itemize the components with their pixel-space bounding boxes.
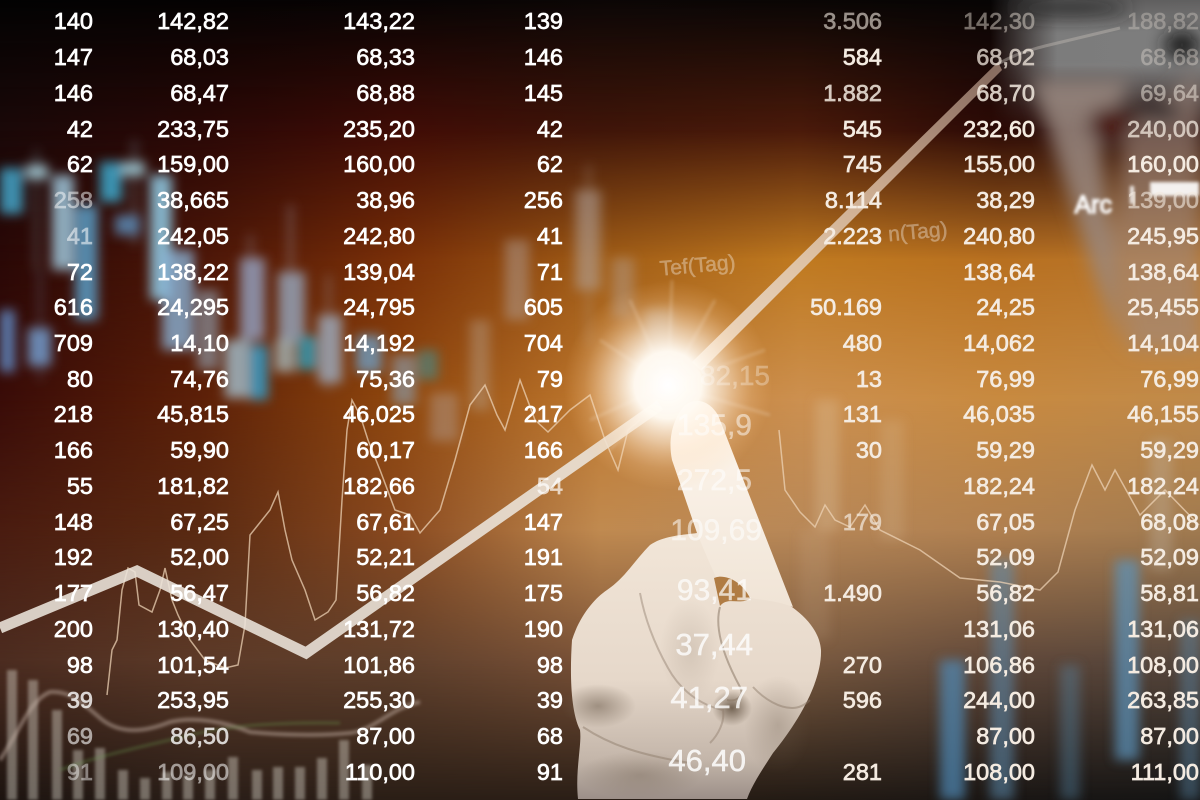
data column 5: 596 bbox=[843, 687, 882, 713]
data column 3 bbox=[343, 8, 415, 785]
ghost labels: 41,27 bbox=[670, 680, 748, 715]
data column 1: 140 bbox=[54, 8, 93, 34]
pointing hand bbox=[560, 401, 821, 799]
data column 6: 138,64 bbox=[963, 259, 1035, 285]
blurred candlesticks left bbox=[0, 140, 673, 441]
ghost labels: 93,41 bbox=[677, 574, 752, 607]
data column 1: 80 bbox=[67, 366, 93, 392]
hand shading bbox=[560, 598, 812, 799]
data column 7: 68,08 bbox=[1140, 509, 1199, 535]
data column 1: 42 bbox=[67, 116, 93, 142]
ghost labels: 37,44 bbox=[675, 627, 753, 662]
pointing finger bbox=[671, 401, 793, 607]
data column 3: 46,025 bbox=[343, 401, 415, 427]
data column 6: 106,86 bbox=[963, 652, 1035, 678]
data column 3: 143,22 bbox=[343, 8, 415, 34]
data column 2: 86,50 bbox=[170, 723, 229, 749]
data column 6: 14,062 bbox=[963, 330, 1035, 356]
data column 7: 182,24 bbox=[1127, 473, 1199, 499]
data column 3: 38,96 bbox=[356, 187, 415, 213]
data column 4: 62 bbox=[537, 151, 563, 177]
data column 7: 59,29 bbox=[1140, 437, 1199, 463]
data column 4: 191 bbox=[524, 544, 563, 570]
data column 7: 108,00 bbox=[1127, 652, 1199, 678]
data column 7: 52,09 bbox=[1140, 544, 1199, 570]
data column 7 bbox=[1127, 8, 1199, 785]
data column 5: 745 bbox=[843, 151, 882, 177]
ghost labels: 109,69 bbox=[670, 514, 762, 547]
data column 5: 8.114 bbox=[825, 187, 882, 213]
data column 7: 245,95 bbox=[1127, 223, 1199, 249]
data column 7: 111,00 bbox=[1131, 759, 1199, 785]
data column 7: 76,99 bbox=[1140, 366, 1199, 392]
data column 5: 131 bbox=[843, 401, 882, 427]
data column 5: 584 bbox=[843, 44, 882, 70]
data column 6: 46,035 bbox=[963, 401, 1035, 427]
data column 6: 76,99 bbox=[976, 366, 1035, 392]
data column 7: 263,85 bbox=[1127, 687, 1199, 713]
data column 4: 68 bbox=[537, 723, 563, 749]
data column 4: 71 bbox=[537, 259, 563, 285]
data column 3: 68,33 bbox=[356, 44, 415, 70]
data column 4: 42 bbox=[537, 116, 563, 142]
data column 4: 175 bbox=[524, 580, 563, 606]
data column 4: 39 bbox=[537, 687, 563, 713]
data column 2: 59,90 bbox=[170, 437, 229, 463]
data column 2: 253,95 bbox=[157, 687, 229, 713]
data column 3: 101,86 bbox=[343, 652, 415, 678]
fist bbox=[571, 533, 821, 799]
data column 4: 79 bbox=[537, 366, 563, 392]
data column 6: 56,82 bbox=[976, 580, 1035, 606]
data column 4: 145 bbox=[524, 80, 563, 106]
data column 6: 87,00 bbox=[976, 723, 1035, 749]
data column 4: 190 bbox=[524, 616, 563, 642]
data column 6: 131,06 bbox=[963, 616, 1035, 642]
data column 1: 62 bbox=[67, 151, 93, 177]
data column 6 bbox=[963, 8, 1035, 785]
data column 1: 147 bbox=[54, 44, 93, 70]
data column 1: 258 bbox=[54, 187, 93, 213]
data column 7: 188,82 bbox=[1127, 8, 1199, 34]
ghost labels: n(Tag) bbox=[887, 218, 948, 246]
data column 3: 68,88 bbox=[356, 80, 415, 106]
data column 5: 13 bbox=[856, 366, 882, 392]
data column 1: 709 bbox=[54, 330, 93, 356]
data column 6: 67,05 bbox=[976, 509, 1035, 535]
data column 3: 182,66 bbox=[343, 473, 415, 499]
data column 7: 14,104 bbox=[1127, 330, 1199, 356]
data column 7: 25,455 bbox=[1127, 294, 1199, 320]
data column 7: 138,64 bbox=[1127, 259, 1199, 285]
data column 5: 545 bbox=[843, 116, 882, 142]
data column 3: 67,61 bbox=[356, 509, 415, 535]
data column 1 bbox=[54, 8, 93, 785]
soft moving average line bbox=[0, 692, 420, 770]
data column 3: 131,72 bbox=[343, 616, 415, 642]
touch glow bbox=[563, 280, 773, 490]
data column 3: 75,36 bbox=[356, 366, 415, 392]
data column 6: 182,24 bbox=[963, 473, 1035, 499]
data column 5: 50.169 bbox=[810, 294, 882, 320]
data column 2: 142,82 bbox=[157, 8, 229, 34]
data column 1: 166 bbox=[54, 437, 93, 463]
data column 2: 101,54 bbox=[157, 652, 229, 678]
data column 6: 244,00 bbox=[963, 687, 1035, 713]
data column 4: 217 bbox=[524, 401, 563, 427]
data column 3: 139,04 bbox=[343, 259, 415, 285]
data column 1: 200 bbox=[54, 616, 93, 642]
data column 2: 68,47 bbox=[170, 80, 229, 106]
data column 6: 52,09 bbox=[976, 544, 1035, 570]
data column 6: 68,70 bbox=[976, 80, 1035, 106]
data column 2: 38,665 bbox=[157, 187, 229, 213]
white rising arrow line bbox=[0, 28, 1120, 653]
data column 4: 704 bbox=[524, 330, 563, 356]
data column 2: 67,25 bbox=[170, 509, 229, 535]
data column 6: 155,00 bbox=[963, 151, 1035, 177]
data column 1: 148 bbox=[54, 509, 93, 535]
data column 3: 160,00 bbox=[343, 151, 415, 177]
data column 4: 146 bbox=[524, 44, 563, 70]
data column 7: 87,00 bbox=[1140, 723, 1199, 749]
data column 7: 240,00 bbox=[1127, 116, 1199, 142]
finger shadow gap bbox=[714, 576, 751, 606]
data column 4: 41 bbox=[537, 223, 563, 249]
ghost labels: Tef(Tag) bbox=[659, 251, 736, 281]
data column 4: 147 bbox=[524, 509, 563, 535]
data column 4 bbox=[524, 8, 563, 785]
data column 2: 109,00 bbox=[157, 759, 229, 785]
data column 1: 39 bbox=[67, 687, 93, 713]
data column 2: 74,76 bbox=[170, 366, 229, 392]
ghost labels: 82,15 bbox=[700, 360, 770, 391]
data column 3: 52,21 bbox=[356, 544, 415, 570]
data column 5 bbox=[810, 8, 882, 785]
data column 7: 68,68 bbox=[1140, 44, 1199, 70]
ghost labels: 135,9 bbox=[677, 409, 752, 442]
data column 2 bbox=[157, 8, 229, 785]
data column 5: 2.223 bbox=[823, 223, 882, 249]
ghost labels bbox=[659, 218, 948, 778]
data column 3: 14,192 bbox=[343, 330, 415, 356]
data column 5: 270 bbox=[843, 652, 882, 678]
data column 3: 110,00 bbox=[345, 759, 415, 785]
volume bars bottom left bbox=[7, 670, 372, 800]
data column 6: 240,80 bbox=[963, 223, 1035, 249]
data column 4: 98 bbox=[537, 652, 563, 678]
data column 6: 59,29 bbox=[976, 437, 1035, 463]
data column 5: 179 bbox=[843, 509, 882, 535]
data column 3: 255,30 bbox=[343, 687, 415, 713]
data column 5: 30 bbox=[856, 437, 882, 463]
data column 6: 38,29 bbox=[976, 187, 1035, 213]
data column 1: 72 bbox=[67, 259, 93, 285]
data column 7: 131,06 bbox=[1127, 616, 1199, 642]
data column 2: 24,295 bbox=[157, 294, 229, 320]
data column 4: 91 bbox=[537, 759, 563, 785]
data column 3: 235,20 bbox=[343, 116, 415, 142]
data column 2: 233,75 bbox=[157, 116, 229, 142]
data column 2: 130,40 bbox=[157, 616, 229, 642]
data column 7: 46,155 bbox=[1127, 401, 1199, 427]
data column 2: 68,03 bbox=[170, 44, 229, 70]
blurred candlesticks right bbox=[800, 400, 1200, 800]
data column 4: 166 bbox=[524, 437, 563, 463]
data column 2: 45,815 bbox=[157, 401, 229, 427]
data column 6: 232,60 bbox=[963, 116, 1035, 142]
data column 4: 605 bbox=[524, 294, 563, 320]
thin price line chart bbox=[107, 380, 1199, 695]
data column 3: 87,00 bbox=[356, 723, 415, 749]
data column 3: 56,82 bbox=[356, 580, 415, 606]
data column 1: 41 bbox=[67, 223, 93, 249]
data column 1: 218 bbox=[54, 401, 93, 427]
data column 1: 98 bbox=[67, 652, 93, 678]
data column 2: 14,10 bbox=[170, 330, 229, 356]
data column 5: 281 bbox=[843, 759, 882, 785]
overlay labels: Arc bbox=[1074, 191, 1112, 219]
data column 6: 108,00 bbox=[963, 759, 1035, 785]
data column 7: 58,81 bbox=[1140, 580, 1199, 606]
data column 1: 91 bbox=[67, 759, 93, 785]
data column 3: 24,795 bbox=[343, 294, 415, 320]
data column 6: 24,25 bbox=[976, 294, 1035, 320]
ghost labels: 46,40 bbox=[668, 743, 746, 778]
hand creases bbox=[583, 593, 810, 763]
data column 7: 160,00 bbox=[1127, 151, 1199, 177]
overlay labels bbox=[1074, 182, 1199, 219]
data column 5: 1.490 bbox=[823, 580, 882, 606]
suit shoulders at top right bbox=[990, 0, 1200, 130]
data column 3: 60,17 bbox=[356, 437, 415, 463]
data column 6: 142,30 bbox=[963, 8, 1035, 34]
data column 1: 146 bbox=[54, 80, 93, 106]
data column 3: 242,80 bbox=[343, 223, 415, 249]
data column 2: 52,00 bbox=[170, 544, 229, 570]
data column 2: 159,00 bbox=[157, 151, 229, 177]
data column 2: 138,22 bbox=[157, 259, 229, 285]
data column 1: 192 bbox=[54, 544, 93, 570]
data column 4: 139 bbox=[524, 8, 563, 34]
data column 2: 181,82 bbox=[157, 473, 229, 499]
data column 4: 54 bbox=[537, 473, 563, 499]
data column 2: 56,47 bbox=[170, 580, 229, 606]
ghost labels: 272,5 bbox=[677, 464, 752, 497]
data column 2: 242,05 bbox=[157, 223, 229, 249]
data column 5: 480 bbox=[843, 330, 882, 356]
data column 5: 1.882 bbox=[823, 80, 882, 106]
blurred suit collar at top right bbox=[1010, 1, 1200, 350]
data column 7: 139,00 bbox=[1127, 187, 1199, 213]
data column 1: 69 bbox=[67, 723, 93, 749]
data column 6: 68,02 bbox=[976, 44, 1035, 70]
data column 5: 3.506 bbox=[823, 8, 882, 34]
data column 4: 256 bbox=[524, 187, 563, 213]
data column 1: 177 bbox=[54, 580, 93, 606]
data column 1: 55 bbox=[67, 473, 93, 499]
data column 1: 616 bbox=[54, 294, 93, 320]
data column 7: 69,64 bbox=[1140, 80, 1199, 106]
